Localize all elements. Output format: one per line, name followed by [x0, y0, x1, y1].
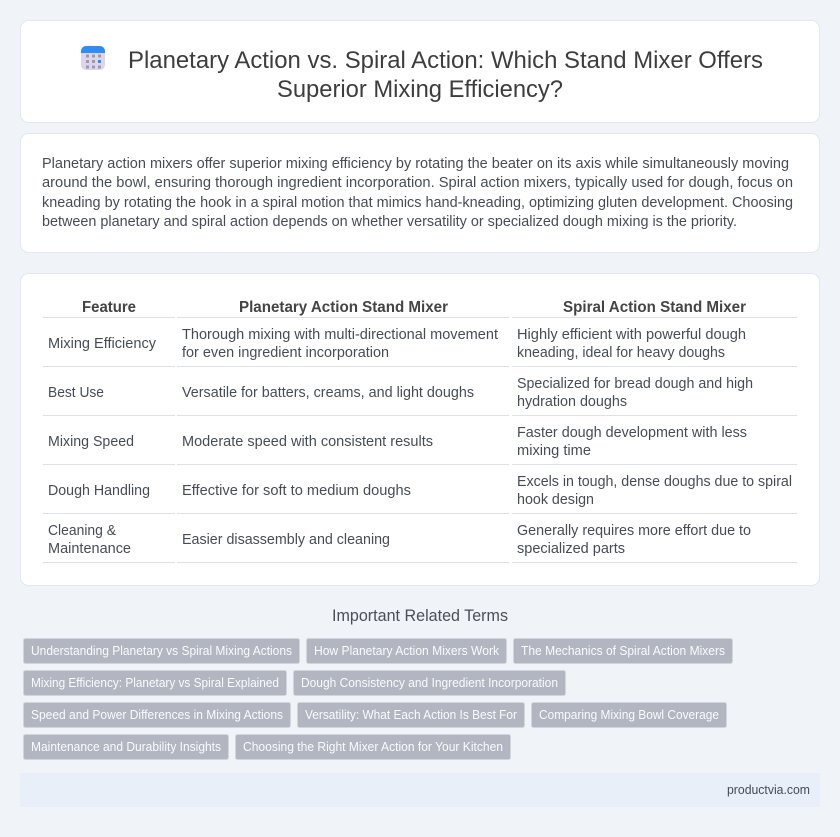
row: best use: hydration doughs — [517, 394, 627, 410]
table header: Planetary Action Stand Mixer — [239, 299, 448, 316]
intro text: between planetary and spiral action depends on whether versatility or specialized dough mixing is the priority. — [42, 214, 737, 230]
tag: How Planetary Action Mixers Work — [314, 644, 500, 658]
row: cleaning and maintenance: Easier disassembly and cleaning — [182, 532, 390, 548]
tag — [294, 670, 566, 696]
tag — [24, 702, 290, 728]
table header: Feature — [82, 299, 136, 316]
panel: intro paragraph — [20, 134, 820, 252]
title: Superior Mixing Efficiency? — [277, 76, 563, 103]
row: dough handling: hook design — [517, 492, 594, 508]
tag — [306, 638, 506, 664]
footer bar: productvia.com — [727, 782, 810, 797]
table header — [82, 299, 746, 316]
heading: important related terms: Important Related Terms — [332, 607, 508, 625]
row: mixing efficiency: Mixing Efficiency — [48, 336, 157, 352]
tag — [24, 734, 228, 760]
row: cleaning and maintenance — [48, 523, 751, 557]
title — [128, 47, 763, 103]
icon: calendar grid — [81, 46, 105, 70]
footer bar — [20, 773, 820, 807]
row: mixing efficiency: for even ingredient incorporation — [182, 345, 389, 361]
row: dough handling: Dough Handling — [48, 483, 150, 499]
tag: Comparing Mixing Bowl Coverage — [539, 708, 719, 722]
tag: Dough Consistency and Ingredient Incorporation — [301, 676, 558, 690]
tag — [298, 702, 524, 728]
row: dough handling: Excels in tough, dense doughs due to spiral — [517, 474, 792, 490]
row: best use: Versatile for batters, creams, and light doughs — [182, 385, 474, 401]
title: Planetary Action vs. Spiral Action: Which Stand Mixer Offers — [128, 47, 763, 74]
tag: Understanding Planetary vs Spiral Mixing Actions — [31, 644, 292, 658]
row: best use: Best Use — [48, 385, 104, 401]
tag: Choosing the Right Mixer Action for Your Kitchen — [243, 740, 503, 754]
intro text: around the bowl, ensuring thorough ingredient incorporation. Spiral action mixers, typically used for dough, focus on — [42, 175, 793, 191]
row: cleaning and maintenance: Generally requires more effort due to — [517, 523, 751, 539]
intro text: Planetary action mixers offer superior mixing efficiency by rotating the beater on its axis while simultaneously moving — [42, 156, 789, 172]
row: cleaning and maintenance: Cleaning & — [48, 523, 116, 539]
row: best use — [48, 376, 753, 410]
row: dough handling: Effective for soft to medium doughs — [182, 483, 411, 499]
intro text: kneading by rotating the hook in a spiral motion that mimics hand-kneading, optimizing gluten development. Choosing — [42, 195, 793, 211]
tag: The Mechanics of Spiral Action Mixers — [521, 644, 725, 658]
row: mixing efficiency: Highly efficient with powerful dough — [517, 327, 746, 343]
row: mixing efficiency: kneading, ideal for heavy doughs — [517, 345, 725, 361]
row: best use: Specialized for bread dough and high — [517, 376, 753, 392]
row: dough handling — [48, 474, 792, 508]
tag — [532, 702, 726, 728]
row: mixing speed: mixing time — [517, 443, 591, 459]
row: mixing speed: Moderate speed with consistent results — [182, 434, 433, 450]
tag: Mixing Efficiency: Planetary vs Spiral Explained — [31, 676, 279, 690]
tag list: related terms — [24, 638, 732, 760]
tag — [514, 638, 732, 664]
row: mixing speed — [48, 425, 747, 459]
row: mixing efficiency — [48, 327, 746, 361]
row: mixing efficiency: Thorough mixing with multi-directional movement — [182, 327, 498, 343]
tag: Maintenance and Durability Insights — [31, 740, 221, 754]
tag — [24, 670, 286, 696]
row: mixing speed: Faster dough development with less — [517, 425, 747, 441]
row: cleaning and maintenance: Maintenance — [48, 541, 131, 557]
row: cleaning and maintenance: specialized parts — [517, 541, 625, 557]
panel: comparison table — [20, 274, 820, 586]
row: mixing speed: Mixing Speed — [48, 434, 134, 450]
tag — [236, 734, 510, 760]
tag: Speed and Power Differences in Mixing Actions — [31, 708, 283, 722]
intro text — [42, 156, 793, 230]
tag: Versatility: What Each Action Is Best For — [305, 708, 517, 722]
panel: title header — [20, 20, 820, 122]
tag — [24, 638, 300, 664]
table header: Spiral Action Stand Mixer — [563, 299, 746, 316]
